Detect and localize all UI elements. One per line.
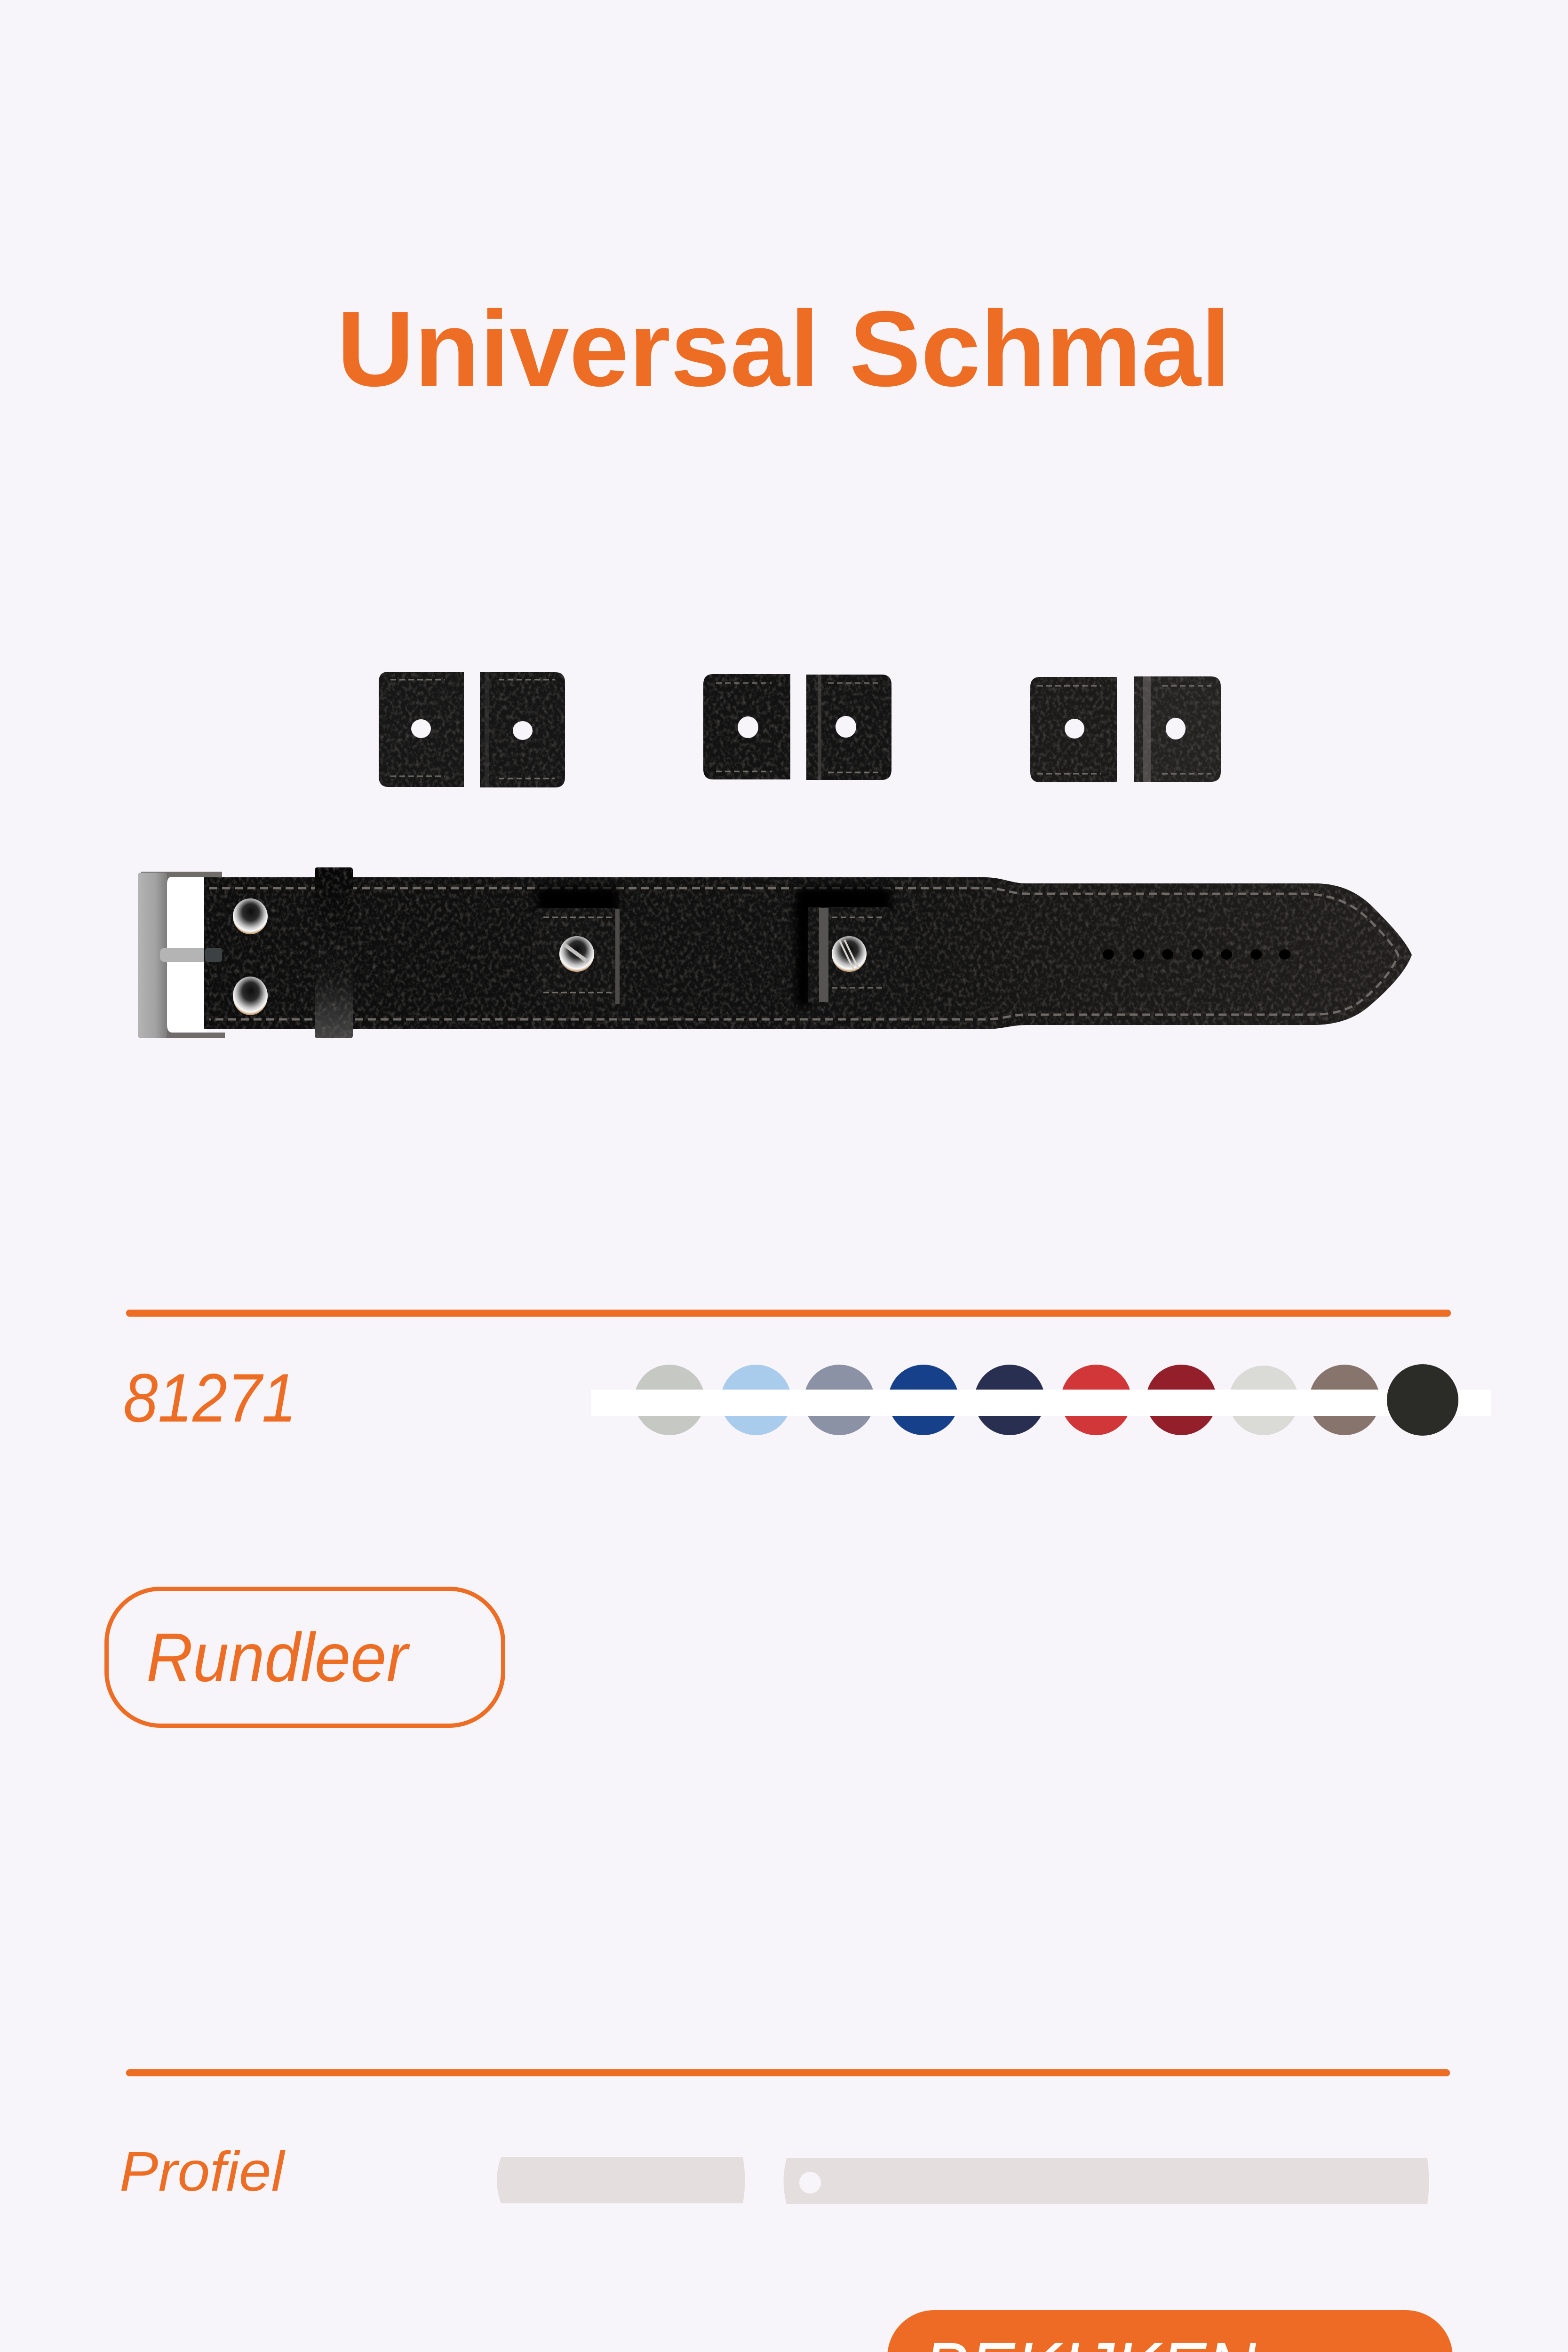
loop pair 2: [703, 674, 891, 780]
spare loops: three pairs: [379, 672, 1221, 787]
strap body: [204, 877, 1412, 1029]
buckle frame: [138, 872, 225, 1038]
loop pair 1: [379, 672, 565, 787]
material tag: [106, 1589, 503, 1725]
upper rivet: [233, 898, 268, 934]
buckle pin tip: [205, 948, 222, 962]
profile diagram: [497, 2157, 1429, 2204]
divider line bottom: [126, 2069, 1450, 2076]
strap holes: [1103, 949, 1290, 960]
profile long piece: [784, 2158, 1429, 2204]
profile short piece: [497, 2157, 745, 2203]
button: [887, 2310, 1453, 2352]
profile label: Profiel: [119, 2140, 286, 2203]
article number: 81271: [123, 1359, 296, 1436]
loop on strap 1: [534, 887, 620, 1004]
profile hole: [799, 2172, 821, 2193]
watch strap with buckle: [138, 867, 1412, 1038]
colour swatches: [591, 1364, 1491, 1436]
loop on strap 2: [795, 887, 892, 1007]
title: Universal Schmal: [337, 289, 1231, 409]
lower rivet: [233, 977, 268, 1015]
stitching: [209, 888, 1398, 1019]
loop pair 3: [1030, 676, 1221, 782]
divider line top: [126, 1310, 1451, 1317]
material tag: Rundleer: [146, 1619, 410, 1696]
keeper: [315, 867, 353, 1038]
